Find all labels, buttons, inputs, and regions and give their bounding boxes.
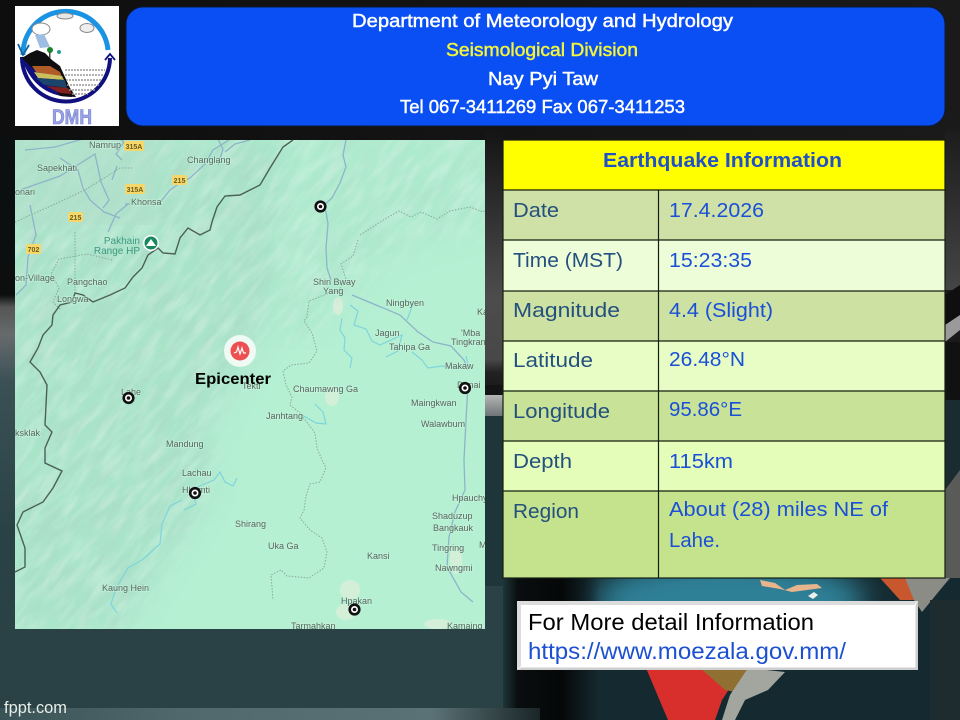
map labels: Yang <box>323 286 343 296</box>
city markers <box>124 202 470 614</box>
road shields: 215 <box>174 178 185 185</box>
map labels: Hpakan <box>341 596 372 606</box>
provincial dotted boundaries <box>15 168 503 600</box>
map labels: Chaumawng Ga <box>293 384 358 394</box>
road shields: 315A <box>126 144 142 151</box>
map labels: Lahe <box>121 387 141 397</box>
row: depth: 115km <box>669 451 733 473</box>
map labels: Namrup <box>89 140 121 150</box>
map labels: Janhtang <box>266 411 303 421</box>
info text: For More detail Information <box>528 609 814 635</box>
map labels: Pangchao <box>67 277 108 287</box>
row: longitude: 95.86°E <box>669 399 742 421</box>
row: latitude: 26.48°N <box>669 349 745 371</box>
website link: https://www.moezala.gov.mm/ <box>528 638 847 664</box>
header banner <box>126 7 945 126</box>
international border <box>15 140 293 572</box>
row: longitude: Longitude <box>513 401 610 423</box>
map labels: Hpauchy <box>452 493 488 503</box>
map labels: Shin Bway <box>313 277 356 287</box>
row: depth: Depth <box>513 451 572 473</box>
row: region <box>513 499 888 552</box>
row: depth <box>513 451 733 473</box>
park marker: Pakhain Range HP: Pakhain <box>104 236 140 247</box>
row: region: Region <box>513 501 579 523</box>
map labels: Hkamti <box>182 485 210 495</box>
town patches <box>325 297 462 629</box>
footer strip <box>0 708 540 720</box>
row: date <box>513 200 764 222</box>
header text: division: Seismological Division <box>446 40 638 60</box>
header text: contact: Tel 067-3411269 Fax 067-3411253 <box>400 97 685 117</box>
map labels: Walawbum <box>421 419 465 429</box>
globe <box>503 578 960 720</box>
map labels: Bangkauk <box>433 523 474 533</box>
map labels: M <box>479 540 486 550</box>
row: date: Date <box>513 200 559 222</box>
earthquake information table <box>503 140 945 578</box>
icon: epicenter marker <box>224 335 256 367</box>
row: region: About (28) miles NE of <box>669 499 888 521</box>
footer brand: fppt.com <box>4 698 67 717</box>
park marker: Pakhain Range HP <box>94 235 159 257</box>
row: time: Time (MST) <box>513 250 623 272</box>
row: time <box>513 250 752 272</box>
map labels: Tingkran <box>451 337 486 347</box>
map panel <box>15 136 503 631</box>
road shields <box>26 141 187 254</box>
park marker: Pakhain Range HP: Range HP <box>94 246 140 257</box>
map labels: Nawngmi <box>435 563 473 573</box>
row: region: Lahe. <box>669 530 720 552</box>
more information box <box>517 601 918 670</box>
map labels: Danai <box>457 380 481 390</box>
map labels: Shaduzup <box>432 511 473 521</box>
map labels: Mandung <box>166 439 204 449</box>
row: longitude <box>513 399 742 423</box>
row: time: 15:23:35 <box>669 250 752 272</box>
icon: water cycle <box>18 11 115 102</box>
map labels <box>15 140 488 631</box>
epicenter label: Epicenter <box>195 371 271 388</box>
map labels: ksklak <box>15 428 41 438</box>
map labels: Kamaing <box>447 621 483 631</box>
map labels: Shirang <box>235 519 266 529</box>
row: magnitude: Magnitude <box>513 300 620 322</box>
road shields: 702 <box>28 247 39 254</box>
map labels: Ka <box>477 307 488 317</box>
map labels: Tingring <box>432 543 464 553</box>
map labels: Uka Ga <box>268 541 299 551</box>
map labels: Maingkwan <box>411 398 457 408</box>
map labels: Tekti <box>242 381 261 391</box>
header text: city: Nay Pyi Taw <box>488 69 599 89</box>
row: latitude <box>513 349 745 372</box>
road shields: 315A <box>127 187 143 194</box>
map labels: Jagun <box>375 328 400 338</box>
map labels: Khonsa <box>131 197 162 207</box>
map labels: Changlang <box>187 155 231 165</box>
map labels: Sapekhati <box>37 163 77 173</box>
map labels: Ningbyen <box>386 298 424 308</box>
map labels: Longwa <box>57 294 89 304</box>
header text: department: Department of Meteorology and Hydrology <box>352 11 733 31</box>
table heading: Earthquake Information <box>603 150 842 172</box>
map labels: Tarmahkan <box>291 621 336 631</box>
map labels: Kaung Hein <box>102 583 149 593</box>
map labels: Tahipa Ga <box>389 342 430 352</box>
row: magnitude <box>513 300 773 322</box>
row: magnitude: 4.4 (Slight) <box>669 300 773 322</box>
rivers and roads <box>16 136 473 602</box>
map labels: 'Mba <box>461 328 480 338</box>
map labels: Kansi <box>367 551 390 561</box>
map labels: Lachau <box>182 468 212 478</box>
map labels: onari <box>15 187 35 197</box>
logo <box>15 6 119 129</box>
row: date: 17.4.2026 <box>669 200 764 222</box>
map labels: on-Village <box>15 273 55 283</box>
road shields: 215 <box>70 215 81 222</box>
logo text: DMH <box>52 106 92 129</box>
map labels: Makaw <box>445 361 474 371</box>
row: latitude: Latitude <box>513 350 593 372</box>
